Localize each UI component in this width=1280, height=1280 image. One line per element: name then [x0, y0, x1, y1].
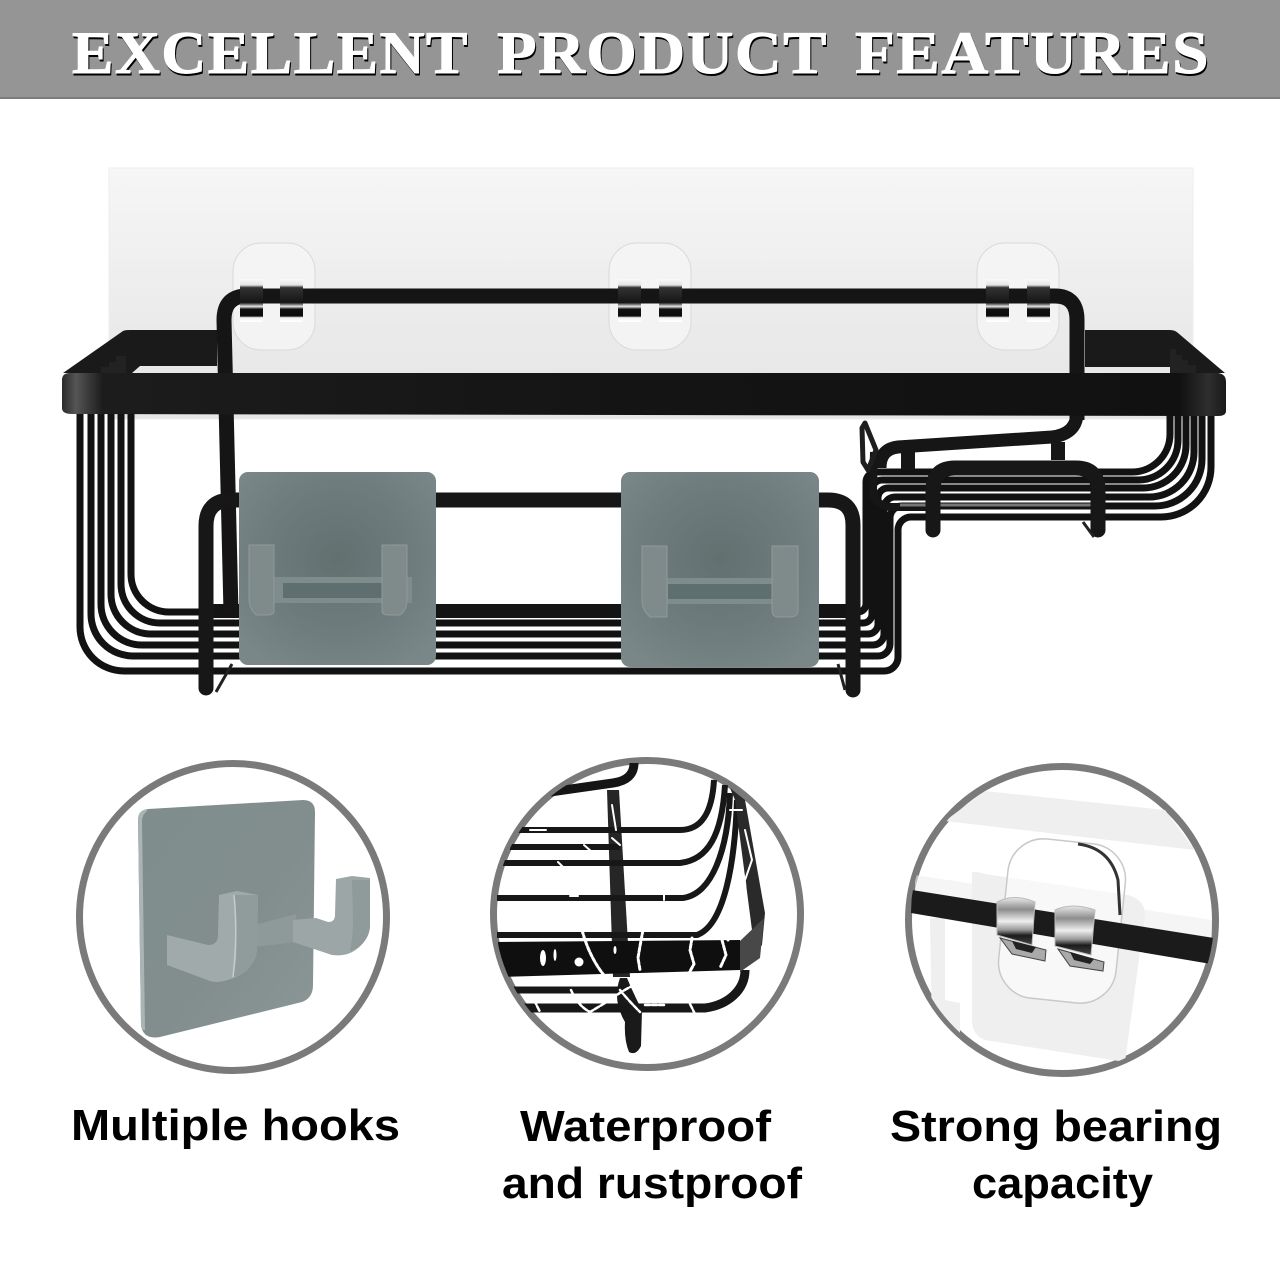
label: waterproof and rustproof: [502, 1102, 802, 1208]
water spots: [540, 946, 616, 966]
side pin: [862, 423, 876, 470]
front band: [62, 373, 1226, 416]
grey hook pad right: [621, 472, 819, 667]
basket wires: [497, 780, 745, 1008]
icon: clear clip on rail: [911, 791, 1214, 1062]
title banner: [0, 0, 1280, 99]
transparent adhesive pads: [233, 243, 1059, 350]
title: [72, 20, 1210, 86]
ring: [908, 766, 1216, 1074]
front band: [498, 940, 740, 977]
adhesive back plate: [109, 168, 1193, 419]
label: waterproof and rustproof: and rustproof: [502, 1159, 802, 1208]
lower front wire: [206, 500, 853, 690]
front hook: [167, 891, 258, 982]
title: EXCELLENT: [72, 20, 469, 86]
feature circle: multiple hooks: [80, 764, 386, 1070]
shelf stubs: [908, 442, 1058, 470]
label: strong bearing capacity: capacity: [972, 1159, 1154, 1208]
title: PRODUCT: [497, 20, 828, 86]
rear band of basket: [63, 330, 1225, 373]
main product: shower caddy: [62, 168, 1226, 692]
center post: [607, 790, 630, 977]
hook backing plate: [138, 800, 315, 1038]
ring: [494, 760, 800, 1068]
label: multiple hooks: Multiple hooks: [71, 1101, 400, 1150]
icon: adhesive hook: [138, 800, 370, 1038]
left clip: [997, 898, 1046, 961]
rear corner wire ends: [101, 349, 1196, 373]
icon: wet wire basket: [497, 763, 765, 1053]
grey hook pad left: [239, 472, 436, 665]
basket wires: [80, 410, 1211, 671]
shelf highlight wire: [900, 504, 1095, 506]
clear pad: [995, 835, 1129, 1007]
rail: [911, 890, 1214, 964]
pad dark edge: [1078, 844, 1120, 915]
ghost basket: [915, 791, 1212, 1062]
right clip: [1055, 906, 1104, 971]
shelf rail: [880, 414, 1077, 468]
feature circle: waterproof: [494, 760, 800, 1068]
rear hook: [293, 876, 370, 955]
side strap: [730, 788, 765, 972]
label: strong bearing capacity: [890, 1102, 1222, 1208]
label: strong bearing capacity: Strong bearing: [890, 1102, 1222, 1151]
lower wire brace: [216, 664, 845, 692]
feature circle: strong bearing: [908, 766, 1216, 1074]
clear clips: [240, 279, 1050, 322]
upper rail: [224, 296, 1077, 612]
label: waterproof and rustproof: Waterproof: [520, 1102, 771, 1151]
shelf front u-hook: [933, 468, 1098, 530]
shelf hook brace: [1083, 522, 1094, 537]
top hook wire: [550, 763, 634, 792]
thick bottom wire: [205, 604, 850, 618]
title: FEATURES: [855, 20, 1210, 86]
water splashes: [530, 805, 752, 1014]
connecting bar: [255, 914, 296, 947]
ring: [80, 764, 386, 1070]
